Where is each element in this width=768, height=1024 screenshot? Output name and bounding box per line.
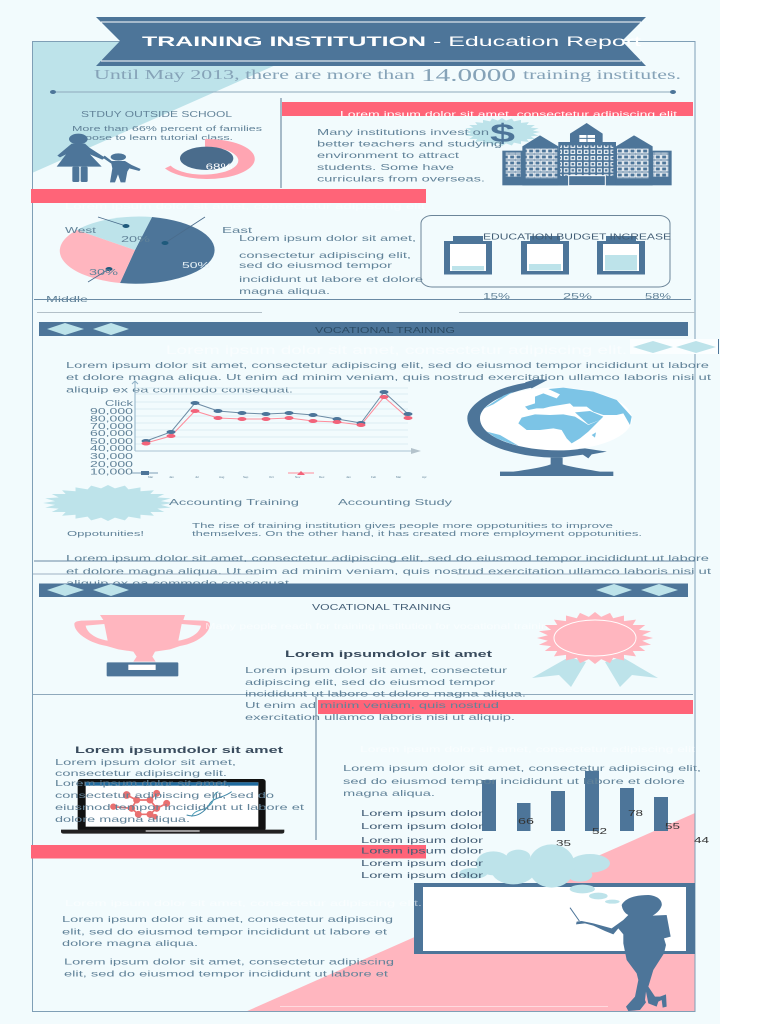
bar chart: 78 bbox=[628, 808, 644, 818]
red bar: regional share bbox=[31, 189, 426, 203]
text: list of items bbox=[361, 808, 483, 880]
text: centre paragraph: incididunt ut labore et dolore magna aliqua. bbox=[245, 688, 526, 698]
subtitle: training institutes. bbox=[523, 67, 681, 82]
chart x-axis labels: Oct bbox=[269, 475, 274, 479]
section bar: vocational training: VOCATIONAL TRAINING bbox=[315, 325, 455, 335]
panel: education budget: 58% bbox=[645, 291, 672, 301]
panel: education budget: 25% bbox=[563, 291, 593, 301]
line chart: clicks: Click bbox=[105, 398, 134, 408]
text: left paragraph: eiusmod tempor incididunt ut labore et bbox=[55, 802, 305, 812]
chart series labels bbox=[169, 497, 453, 507]
chart series labels: Accounting Study bbox=[338, 497, 453, 507]
text: intro paragraph: Lorem ipsum dolor sit amet, consectetur adipiscing elit, sed do eiusmod tempor incididunt ut labore bbox=[66, 360, 710, 370]
heading: study outside school: STDUY OUTSIDE SCHOOL bbox=[81, 109, 233, 119]
background triangle: pink bbox=[245, 813, 695, 1012]
faint caption right column: Lorem ipsum dolor sit amet, consectetur adipiscing elit bbox=[360, 744, 696, 754]
text: lower paragraph 2: elit, sed do eiusmod tempor incididunt ut labore et bbox=[64, 968, 389, 978]
text: rise of training bbox=[192, 521, 642, 538]
text: opportunities: Oppotunities! bbox=[67, 529, 144, 538]
donut chart 68%: 68% bbox=[206, 162, 232, 171]
text: many institutions: environment to attract bbox=[317, 150, 460, 160]
pie chart: regions: West bbox=[65, 225, 97, 235]
subtitle: Until May 2013, there are more than bbox=[94, 67, 415, 82]
subtitle bbox=[94, 65, 681, 85]
faint caption under red bar: Lorem ipsum dolor sit amet, consectetur adipiscing elit bbox=[65, 201, 426, 211]
text: rise of training: themselves. On the other hand, it has created more employment oppotunities. bbox=[192, 529, 642, 538]
subtitle divider bbox=[50, 90, 676, 94]
text: list of items: Lorem ipsum dolor bbox=[361, 846, 483, 856]
faint caption over trophy: Many people reach for training institution for vocational training bbox=[205, 621, 556, 631]
icon: trophy bbox=[74, 615, 210, 676]
text: lower paragraph 2 bbox=[64, 956, 395, 978]
text: second paragraph bbox=[66, 553, 712, 588]
text: right paragraph: Lorem ipsum dolor sit amet, consectetur adipiscing elit, bbox=[343, 763, 701, 773]
bottle 15% bbox=[444, 236, 492, 274]
chart x-axis labels: Jul bbox=[195, 475, 199, 479]
bottle 58% bbox=[597, 236, 645, 274]
line chart: clicks bbox=[90, 381, 427, 479]
line chart: clicks: 30,000 bbox=[90, 451, 134, 461]
chart x-axis labels: Dec bbox=[319, 475, 325, 479]
title text: - Education Report bbox=[433, 33, 641, 49]
chart x-axis labels: Jan bbox=[169, 475, 174, 479]
heading: lorem centre: Lorem ipsumdolor sit amet bbox=[285, 649, 493, 660]
text: pie description bbox=[239, 233, 424, 296]
text: left paragraph: consectetur adipiscing elit, sed do bbox=[55, 790, 275, 800]
icon: school building bbox=[502, 123, 672, 186]
text: pie description: consectetur adipiscing elit, bbox=[239, 250, 411, 260]
icon: dollar burst bbox=[464, 118, 540, 148]
text: many institutions: better teachers and studying bbox=[317, 138, 503, 148]
icon: thought cloud bbox=[459, 844, 620, 904]
background triangle: light blue bbox=[32, 41, 330, 173]
text: list of items: Lorem ipsum dolor bbox=[361, 821, 483, 831]
text: many institutions bbox=[317, 127, 503, 184]
text: second paragraph: et dolore magna aliqua. Ut enim ad minim veniam, quis nostrud exercitation ullamco laboris nisi ut bbox=[66, 566, 712, 576]
pie chart: regions bbox=[46, 217, 253, 304]
text: pie description: sed do eiusmod tempor bbox=[239, 260, 392, 270]
chart x-axis labels: Jan bbox=[346, 475, 351, 479]
text: centre paragraph: Ut enim ad minim veniam, quis nostrud bbox=[245, 700, 500, 710]
text: intro paragraph: et dolore magna aliqua. Ut enim ad minim veniam, quis nostrud exercitation ullamco laboris nisi ut bbox=[66, 372, 712, 382]
bar chart: 55 bbox=[665, 821, 681, 831]
red bar: right column bbox=[318, 700, 693, 714]
red header bar: institutions: Lorem ipsum dolor sit amet, consectetur adipiscing elit bbox=[340, 109, 678, 119]
text: list of items: Lorem ipsum dolor bbox=[361, 858, 483, 868]
chart x-axis labels bbox=[148, 475, 427, 479]
line chart: clicks: 50,000 bbox=[90, 436, 134, 446]
text: pie description: magna aliqua. bbox=[239, 286, 330, 296]
text: pie description: Lorem ipsum dolor sit amet, bbox=[239, 233, 416, 243]
pie chart: regions: 30% bbox=[89, 267, 119, 277]
text: families statistic: choose to learn tutorial class. bbox=[72, 133, 233, 142]
thought bubbles bbox=[570, 885, 620, 904]
text: lower paragraph 1: elit, sed do eiusmod tempor incididunt ut labore et bbox=[62, 926, 388, 936]
pie chart: regions: 20% bbox=[121, 234, 151, 244]
icon: rosette bbox=[532, 612, 658, 687]
title banner bbox=[96, 17, 646, 66]
faint section subtitle: Lorem ipsum dolor sit amet, consectetur adipiscing elit. bbox=[166, 343, 627, 357]
icon: mother and child bbox=[57, 134, 141, 182]
decorative diamonds right bbox=[630, 339, 718, 354]
title text bbox=[142, 33, 641, 49]
text: many institutions: curriculars from overseas. bbox=[317, 174, 485, 184]
text: centre paragraph: Lorem ipsum dolor sit amet, consectetur bbox=[245, 665, 507, 675]
chart series labels: Accounting Training bbox=[169, 497, 300, 507]
line chart: clicks: 40,000 bbox=[90, 443, 134, 453]
line chart: clicks: 10,000 bbox=[90, 466, 134, 476]
line chart: clicks: 90,000 bbox=[90, 406, 134, 416]
pie chart: regions: 50% bbox=[182, 260, 211, 270]
text: second paragraph: aliquip ex ea commodo consequat. bbox=[66, 578, 293, 588]
text: lower paragraph 1: dolore magna aliqua. bbox=[62, 938, 198, 948]
text: lower paragraph 1 bbox=[62, 914, 394, 948]
text: centre paragraph bbox=[245, 665, 526, 722]
icon: dollar burst: $ bbox=[490, 118, 516, 148]
subtitle: 14.0000 bbox=[421, 65, 516, 85]
text: centre paragraph: exercitation ullamco laboris nisi ut aliquip. bbox=[245, 712, 515, 722]
chart x-axis labels: Sep bbox=[243, 475, 249, 479]
pie chart: regions: Middle bbox=[46, 294, 89, 304]
text: families statistic: More than 66% percent of families bbox=[72, 124, 262, 133]
text: intro paragraph bbox=[66, 360, 712, 394]
text: second paragraph: Lorem ipsum dolor sit amet, consectetur adipiscing elit, sed do eiusmod tempor incididunt ut labore bbox=[66, 553, 710, 563]
chart x-axis labels: Mar bbox=[396, 475, 401, 479]
faint caption lower left: Lorem ipsum dolor sit amet, consectetur adipiscing elit. bbox=[65, 898, 422, 908]
line chart: clicks: 70,000 bbox=[90, 421, 134, 431]
text: lower paragraph 1: Lorem ipsum dolor sit amet, consectetur adipiscing bbox=[62, 914, 394, 924]
bar chart: 66 bbox=[518, 816, 535, 826]
section bar: diamonds bbox=[39, 584, 688, 597]
text: pie description: incididunt ut labore et dolore bbox=[239, 274, 424, 284]
text: right paragraph bbox=[343, 763, 701, 798]
heading: lorem left: Lorem ipsumdolor sit amet bbox=[75, 745, 284, 756]
text: left paragraph: consectetur adipiscing elit. bbox=[55, 768, 227, 778]
bar chart: 52 bbox=[592, 826, 608, 836]
bar chart: 44 bbox=[694, 835, 710, 845]
panel: education budget: EDUCATION BUDGET INCREASE bbox=[483, 232, 672, 242]
text: list of items: Lorem ipsum dolor bbox=[361, 808, 483, 818]
text: many institutions: Many institutions invest on bbox=[317, 127, 490, 137]
icon: teacher silhouette bbox=[570, 895, 671, 1011]
icon: laptop bbox=[61, 779, 284, 834]
text: left paragraph: Lorem ipsum dolor sit amet, bbox=[55, 757, 236, 767]
bottle 25% bbox=[521, 236, 569, 274]
text: right paragraph: magna aliqua. bbox=[343, 788, 435, 798]
text: left paragraph: Lorem ipsum dolor sit amet, bbox=[55, 778, 231, 788]
text: rise of training: The rise of training institution gives people more oppotunities to improve bbox=[192, 521, 613, 530]
section bar: vocational training bbox=[39, 322, 688, 336]
red bar: lower left bbox=[31, 845, 426, 858]
chart x-axis labels: Mar bbox=[148, 475, 153, 479]
dna bbox=[187, 792, 232, 817]
text: right paragraph: sed do eiusmod tempor incididunt ut labore et dolore bbox=[343, 776, 686, 786]
blackboard bbox=[414, 883, 695, 954]
title text: TRAINING INSTITUTION bbox=[142, 33, 426, 49]
text: many institutions: students. Some have bbox=[317, 162, 455, 172]
text: centre paragraph: adipiscing elit, sed do eiusmod tempor bbox=[245, 677, 495, 687]
burst: opportunities bbox=[43, 485, 173, 521]
chart x-axis labels: Nov bbox=[295, 475, 301, 479]
bar chart: 35 bbox=[556, 838, 572, 848]
text: left paragraph bbox=[55, 757, 305, 824]
pie chart: regions: East bbox=[222, 225, 253, 235]
heading: vocational training: VOCATIONAL TRAINING bbox=[312, 602, 451, 612]
panel: education budget: 15% bbox=[483, 291, 511, 301]
icon: globe bbox=[467, 379, 632, 476]
text: left paragraph: dolore magna aliqua. bbox=[55, 814, 190, 824]
line chart: clicks: 20,000 bbox=[90, 459, 134, 469]
chart legend bbox=[132, 471, 314, 475]
text: intro paragraph: aliquip ex ea commodo consequat. bbox=[66, 384, 293, 394]
donut chart 68% bbox=[165, 139, 255, 179]
text: families statistic bbox=[72, 124, 262, 142]
divider under trophy section bbox=[33, 694, 693, 696]
chart x-axis labels: Feb bbox=[371, 475, 377, 479]
molecule bbox=[111, 791, 169, 819]
text: list of items: Lorem ipsum dolor bbox=[361, 870, 483, 880]
line chart: clicks: 80,000 bbox=[90, 414, 134, 424]
text: list of items: Lorem ipsum dolor bbox=[361, 835, 483, 845]
chart x-axis labels: Aug bbox=[219, 475, 225, 479]
line chart: clicks: 60,000 bbox=[90, 428, 134, 438]
text: lower paragraph 2: Lorem ipsum dolor sit amet, consectetur adipiscing bbox=[64, 956, 395, 966]
panel: education budget bbox=[421, 216, 672, 301]
red header bar: institutions bbox=[282, 102, 693, 119]
chart x-axis labels: Apr bbox=[422, 475, 427, 479]
bar chart bbox=[482, 771, 710, 848]
